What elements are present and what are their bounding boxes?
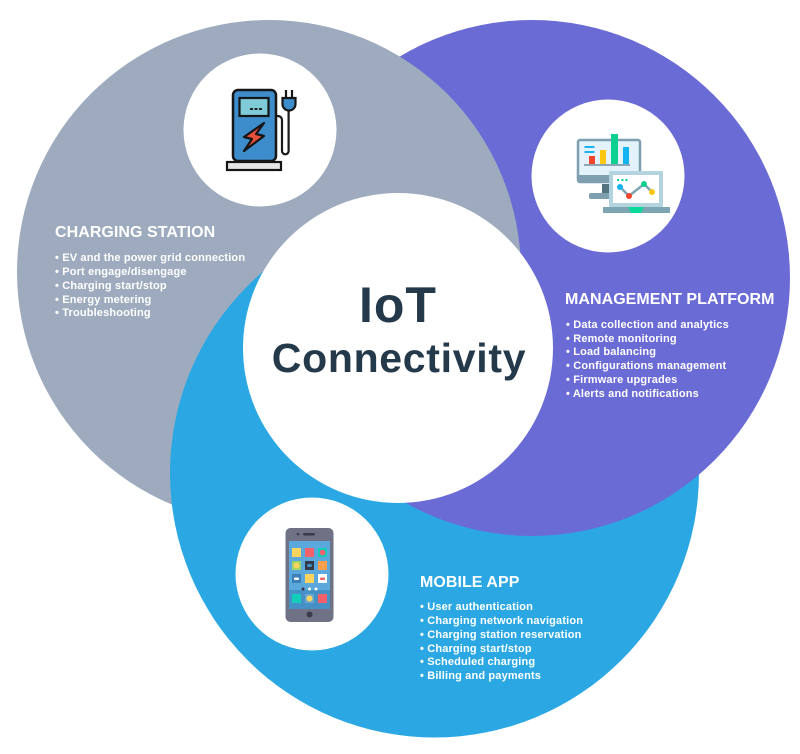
icon: EV charger	[227, 90, 296, 170]
icon circle: app	[236, 498, 388, 650]
text: management platform: • Data collection and analytics	[566, 319, 729, 331]
text: mobile app: • Scheduled charging	[420, 656, 535, 668]
text: charging station: CHARGING STATION	[55, 224, 215, 241]
text: management platform	[565, 291, 775, 400]
icon circle: platform	[532, 100, 684, 252]
icon: monitors	[578, 134, 670, 213]
title: Connectivity	[272, 335, 526, 381]
circle: center	[243, 193, 553, 503]
text: charging station: • Port engage/disengage	[55, 266, 187, 278]
text: management platform: • Load balancing	[566, 346, 656, 358]
circle: mobile app	[170, 208, 699, 738]
icon circle: station	[184, 54, 336, 206]
text: charging station: • EV and the power grid connection	[55, 252, 245, 264]
text: mobile app: • User authentication	[420, 601, 533, 613]
text: charging station: • Charging start/stop	[55, 280, 167, 292]
text: management platform: • Configurations management	[566, 360, 727, 372]
text: charging station: • Energy metering	[55, 294, 151, 306]
text: management platform: MANAGEMENT PLATFORM	[565, 291, 775, 308]
circle: charging station overlap	[275, 56, 520, 254]
text: mobile app	[420, 574, 583, 682]
text: management platform: • Firmware upgrades	[566, 374, 677, 386]
text: charging station: • Troubleshooting	[55, 307, 151, 319]
text: charging station	[55, 224, 245, 319]
icon: smartphone	[286, 528, 334, 622]
circle: management platform	[274, 20, 790, 536]
title: IoT	[359, 277, 437, 333]
text: mobile app: • Charging station reservation	[420, 629, 582, 641]
title	[272, 277, 526, 381]
text: mobile app: • Charging start/stop	[420, 643, 532, 655]
circle: charging station	[17, 20, 521, 524]
text: mobile app: MOBILE APP	[420, 574, 520, 591]
text: mobile app: • Billing and payments	[420, 670, 541, 682]
text: management platform: • Alerts and notifications	[566, 388, 699, 400]
text: mobile app: • Charging network navigation	[420, 615, 583, 627]
text: management platform: • Remote monitoring	[566, 333, 677, 345]
